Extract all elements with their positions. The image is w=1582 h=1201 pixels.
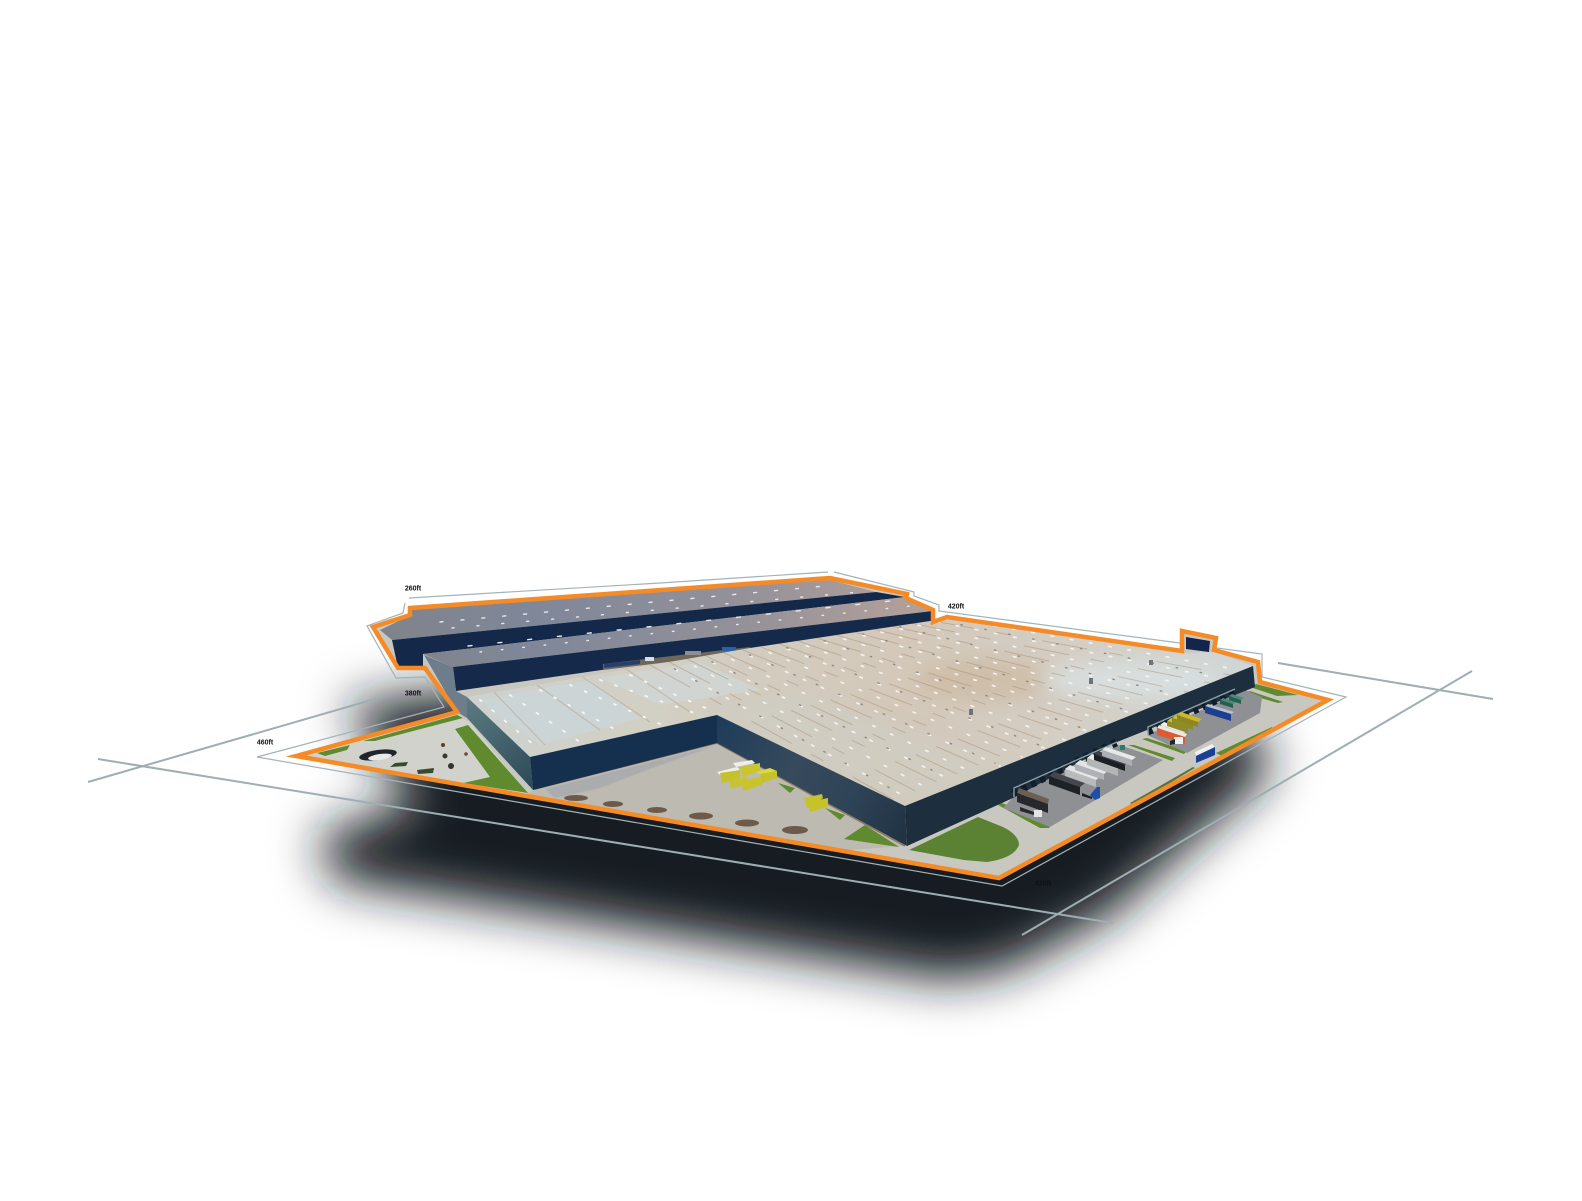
lone truck — [1195, 744, 1215, 763]
dimension label 380ft: 380ft — [405, 690, 422, 698]
thick site reference lines — [88, 663, 1493, 935]
middle building wall — [453, 611, 933, 691]
dimension label 430ft: 430ft — [1035, 880, 1052, 888]
tree beds — [564, 795, 808, 834]
loading yard asphalt — [1003, 690, 1262, 827]
courtyard side wall — [717, 715, 907, 846]
paved yard — [296, 684, 1298, 862]
ground shadow — [318, 690, 1272, 980]
trailers at dock — [1017, 694, 1244, 813]
roof skylights — [674, 622, 1227, 794]
rear roof strip — [380, 580, 876, 640]
rear roof skylights — [440, 586, 920, 652]
wing front wall — [530, 715, 717, 790]
rear building wall — [392, 592, 905, 668]
tractor units — [1020, 737, 1183, 817]
main roof — [467, 615, 1253, 806]
wing side wall — [467, 697, 533, 790]
rooftop units — [969, 709, 973, 715]
warehouse site aerial — [296, 578, 1328, 878]
sloped end wall — [424, 655, 467, 718]
dimension label 420ft: 420ft — [948, 604, 965, 610]
dimension label 260ft: 260ft — [405, 586, 422, 592]
loading dock wall — [905, 666, 1255, 846]
middle roof strip — [423, 597, 933, 667]
ground plot — [296, 578, 1328, 878]
pale roof panels — [480, 680, 640, 745]
tower door — [1186, 637, 1210, 652]
sculpture and planting — [358, 743, 468, 774]
parked items behind roof — [603, 647, 750, 670]
dimension label 460ft: 460ft — [257, 740, 274, 746]
roof seams — [650, 620, 1231, 806]
thin dimension outline — [257, 572, 1346, 886]
yellow containers — [717, 760, 828, 812]
dock canopies and doors — [1013, 689, 1235, 797]
green verges — [317, 684, 1298, 862]
orange site boundary — [296, 578, 1328, 878]
